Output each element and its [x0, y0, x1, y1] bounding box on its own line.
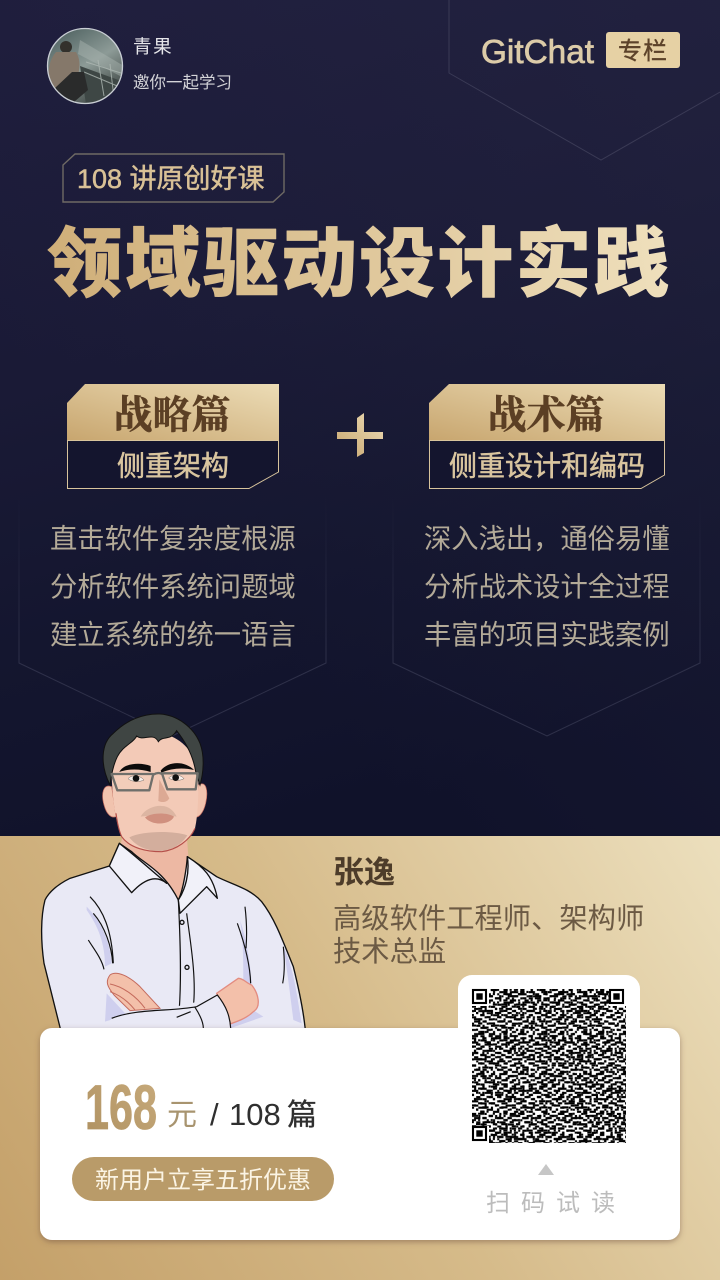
- card with QR tab: [40, 975, 680, 1240]
- plate: strategy: [67, 384, 279, 488]
- plate: tactics: [429, 384, 665, 488]
- ears: [103, 784, 207, 817]
- hair: [103, 714, 203, 785]
- author bio: [333, 902, 644, 967]
- badge: 108 lessons: [63, 154, 284, 202]
- author portrait: [42, 714, 305, 1030]
- left hand: [107, 973, 160, 1011]
- title: 领域驱动设计实践: [47, 222, 672, 306]
- hexagon outline: left panel: [19, 495, 326, 736]
- price: /: [210, 1097, 219, 1132]
- left panel bullet text: 建立系统的统一语言: [50, 619, 296, 650]
- plate: tactics: 战术篇: [487, 394, 605, 438]
- author name: 张逸: [333, 855, 395, 890]
- author bio: 技术总监: [333, 935, 446, 967]
- inviter text: 邀你一起学习: [133, 73, 232, 92]
- avatar ring: [48, 28, 122, 104]
- plate: tactics: 侧重设计和编码: [449, 450, 645, 482]
- right hand: [217, 978, 258, 1024]
- brand logo: GitChat column: GitChat: [481, 33, 594, 70]
- shirt placket: [88, 897, 284, 1008]
- dark background: [0, 0, 720, 836]
- inviter text: [133, 36, 232, 92]
- author bio: 高级软件工程师、架构师: [333, 902, 644, 934]
- nose: [158, 779, 169, 802]
- glasses: [112, 773, 198, 790]
- shirt: [42, 843, 305, 1030]
- scan prompt text: 扫码试读: [486, 1190, 626, 1217]
- QR code: [472, 989, 626, 1143]
- mouth: [145, 813, 174, 824]
- gold lower panel: [0, 836, 720, 1280]
- badge: 108 lessons: 108 讲原创好课: [77, 164, 265, 194]
- brand logo: GitChat column: [481, 32, 680, 70]
- right panel bullet text: [424, 523, 670, 650]
- brand logo: GitChat column: 专栏: [618, 38, 668, 65]
- price: 篇: [287, 1099, 317, 1132]
- right panel bullet text: 深入浅出，通俗易懂: [424, 523, 670, 554]
- plus sign: [337, 413, 383, 457]
- inviter text: 青果: [133, 36, 173, 57]
- discount pill: [72, 1157, 334, 1201]
- avatar: [47, 28, 124, 104]
- moustache: [141, 806, 177, 817]
- price: [85, 1073, 317, 1143]
- price: 168: [85, 1073, 157, 1143]
- right panel bullet text: 分析战术设计全过程: [424, 571, 670, 602]
- hexagon outline: right panel: [393, 495, 700, 736]
- price: 元: [167, 1099, 197, 1132]
- hexagon outline: top right: [449, 0, 720, 160]
- shirt shadows: [87, 907, 302, 1028]
- plate: strategy: 战略篇: [113, 394, 231, 438]
- neck: [120, 838, 188, 898]
- eyes: [128, 775, 184, 782]
- left panel bullet text: [50, 523, 296, 650]
- left panel bullet text: 直击软件复杂度根源: [50, 523, 296, 554]
- price: 108: [229, 1097, 281, 1132]
- discount pill: 新用户立享五折优惠: [95, 1167, 311, 1194]
- right panel bullet text: 丰富的项目实践案例: [424, 619, 670, 650]
- left panel bullet text: 分析软件系统问题域: [50, 571, 296, 602]
- scan prompt arrow: [538, 1164, 554, 1175]
- buttons: [180, 920, 190, 970]
- chin shadow: [129, 832, 187, 851]
- face: [112, 733, 198, 852]
- jaw line: [116, 813, 195, 852]
- forearm: [111, 996, 230, 1025]
- eyebrows: [119, 763, 194, 773]
- collar: [109, 843, 217, 913]
- plate: strategy: 侧重架构: [117, 450, 229, 482]
